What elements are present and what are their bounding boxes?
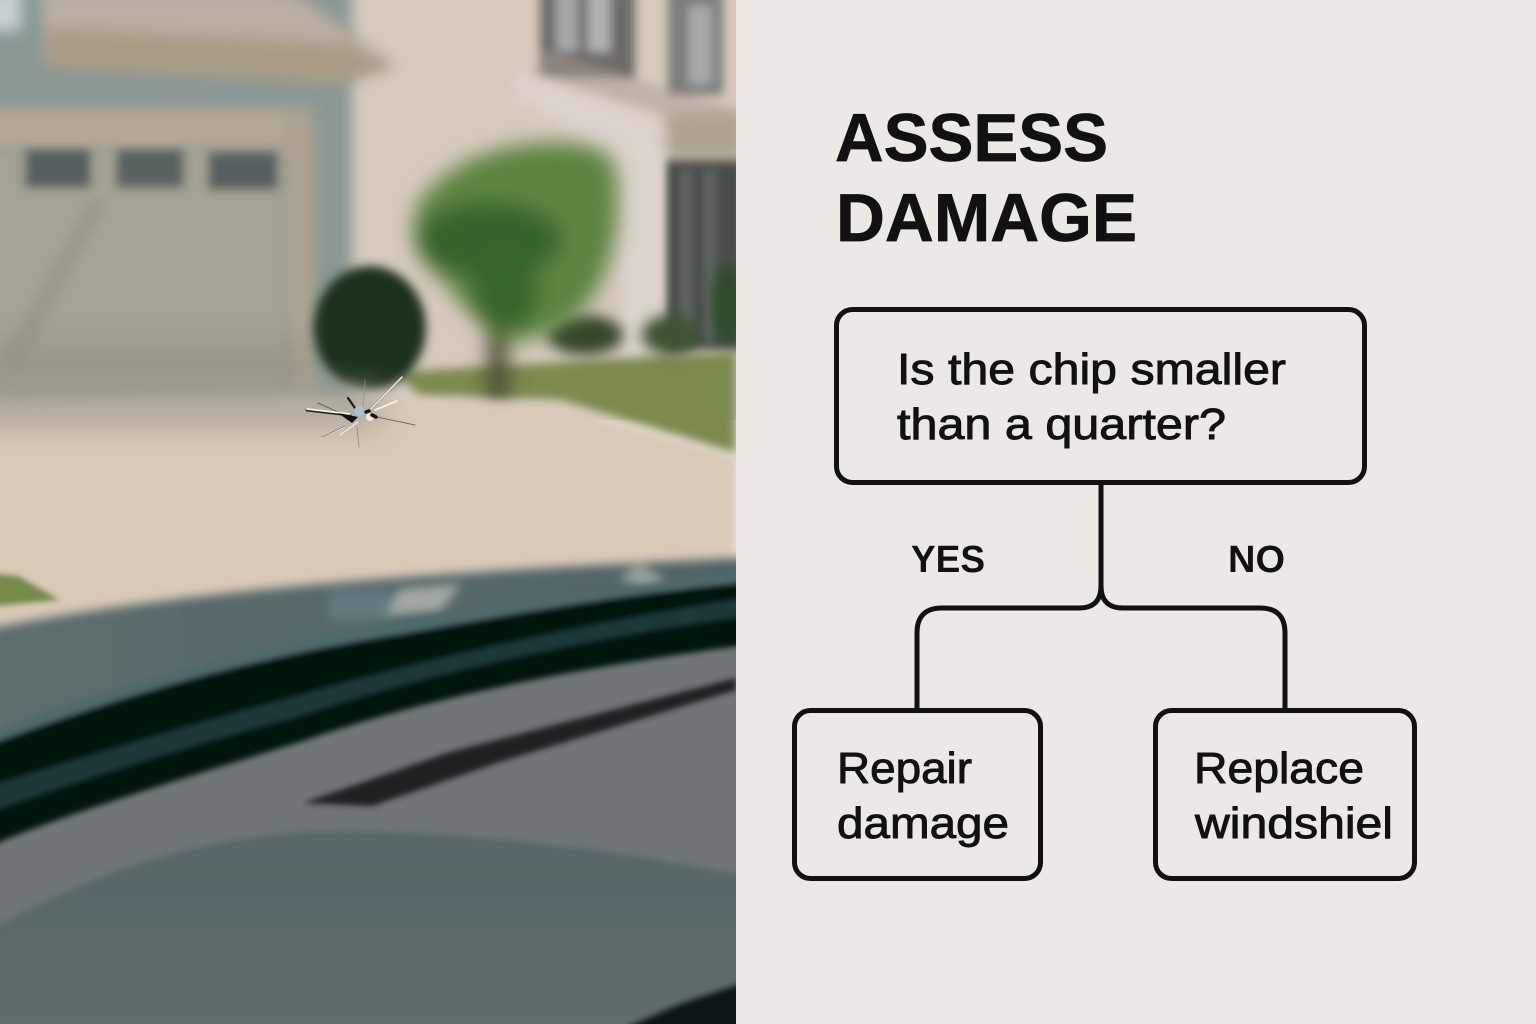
porch interior xyxy=(664,160,744,350)
replace box xyxy=(1156,710,1414,878)
label: yes: YES xyxy=(911,539,985,581)
porch column xyxy=(622,150,664,355)
flowchart connector lines xyxy=(917,483,1285,709)
porch lintel xyxy=(518,72,736,160)
replace box: windshiel xyxy=(1194,799,1393,848)
lawn xyxy=(395,352,736,455)
garage door xyxy=(0,150,284,400)
dark wiper strip xyxy=(0,572,746,846)
tree xyxy=(413,143,618,402)
house wall background xyxy=(347,0,736,420)
title xyxy=(835,100,1137,256)
icon: windshield chip crack xyxy=(307,377,415,447)
garage door lower shading xyxy=(0,342,306,388)
porch shrubs xyxy=(547,265,744,355)
repair box xyxy=(794,710,1040,878)
lower dashboard xyxy=(0,644,736,929)
defrost vent slot xyxy=(303,678,736,806)
repair box: damage xyxy=(837,799,1009,848)
question box: than a quarter? xyxy=(897,400,1226,449)
dashboard corner shadow xyxy=(626,982,736,1024)
driveway xyxy=(0,398,736,660)
dashboard hump xyxy=(0,832,746,1024)
question box xyxy=(836,310,1364,482)
title: DAMAGE xyxy=(836,180,1137,256)
dash upper surface reflected in glass xyxy=(0,551,736,732)
label: no: NO xyxy=(1228,539,1285,581)
upper windows xyxy=(532,0,732,114)
grass at lower left xyxy=(0,574,60,606)
panel: flowchart background xyxy=(736,0,1536,1024)
round shrub xyxy=(314,266,426,390)
garage roof overhang xyxy=(40,0,392,84)
repair box: Repair xyxy=(837,744,972,793)
garage siding xyxy=(0,0,352,410)
driveway shadow xyxy=(0,388,380,428)
title: ASSESS xyxy=(835,100,1108,176)
replace box: Replace xyxy=(1194,744,1364,793)
photo: windshield chip view of house and dashboard xyxy=(0,0,746,1024)
garage door frame xyxy=(0,108,314,402)
question box: Is the chip smaller xyxy=(897,345,1286,394)
